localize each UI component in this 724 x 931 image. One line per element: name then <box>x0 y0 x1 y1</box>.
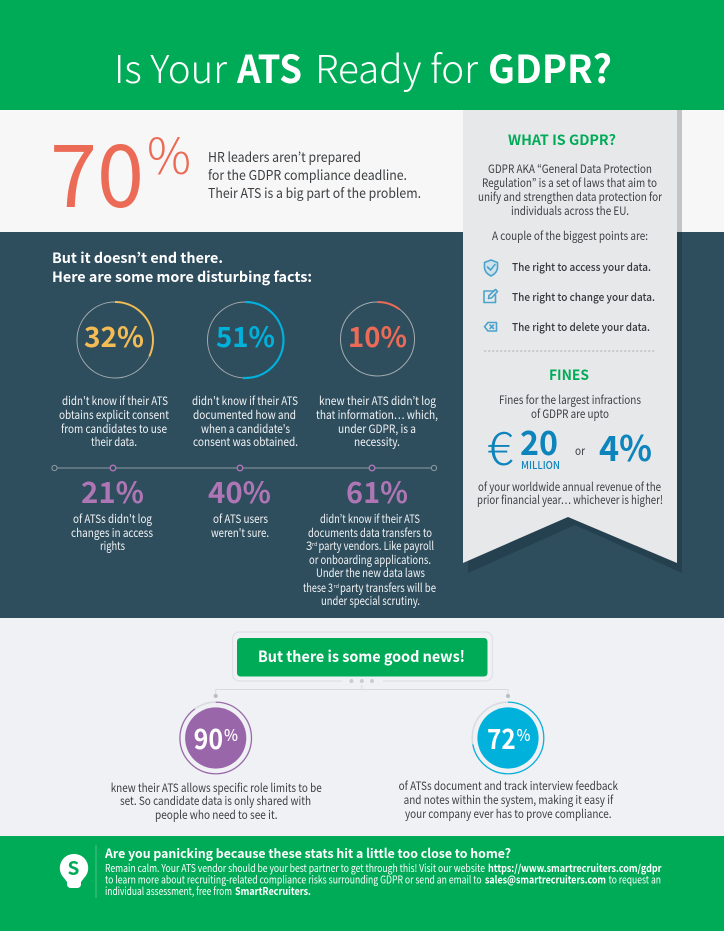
text: 32% description: from candidates to use <box>61 421 167 437</box>
text: 90% description: set. So candidate data is only shared with <box>120 793 311 809</box>
stat: 21%: of ATSs didn't log <box>73 511 152 527</box>
connector lines <box>214 685 510 698</box>
stat: 61%: party vendors. Like payroll <box>318 538 434 554</box>
text: 10% description <box>316 393 438 450</box>
stat: 90%: 90 <box>194 717 223 757</box>
text: 51% description: when a candidate's <box>201 421 290 437</box>
text: 72% description: of ATSs document and track interview feedback <box>399 778 619 794</box>
stat: 21%: rights <box>100 538 125 554</box>
fine: 20 million euro: MILLION <box>521 458 560 473</box>
stat: 90% <box>180 702 252 774</box>
footer body <box>105 860 662 898</box>
stat: 61%: 61% <box>346 470 408 512</box>
panel: footer <box>0 836 724 931</box>
footer body: to request an <box>609 872 661 886</box>
panel: disturbing facts <box>0 232 724 618</box>
text: 51% description: didn't know if their ATS <box>192 393 298 409</box>
fines intro: of GDPR are upto <box>531 406 609 422</box>
header band <box>0 0 724 110</box>
intro text <box>208 147 421 202</box>
text: 90% description <box>111 780 322 823</box>
GDPR definition: unify and strengthen data protection for <box>478 189 662 205</box>
text: 10% description: necessity. <box>354 434 400 450</box>
points intro: A couple of the biggest points are: <box>492 228 648 244</box>
text: 51% description: documented how and <box>193 407 296 423</box>
footer body: individual assessment, free from <box>105 883 232 898</box>
right to delete: The right to delete your data. <box>512 319 650 335</box>
or: or <box>575 443 585 459</box>
fines intro: Fines for the largest infractions <box>499 392 641 408</box>
donut stat: 32%: 32% <box>84 316 144 356</box>
stat: 61%: 3 <box>306 538 312 554</box>
stat: 61%: rd <box>334 582 339 590</box>
donut stat: 51%: 51% <box>216 316 275 356</box>
icon: light bulb: S <box>68 854 80 881</box>
stat: 21%: 21% <box>81 470 144 512</box>
intro text: for the GDPR compliance deadline. <box>208 165 407 184</box>
fines footnote: of your worldwide annual revenue of the <box>478 479 661 495</box>
text: 72% description: and notes within the system, making it easy if <box>404 792 614 808</box>
text: 32% description <box>59 393 170 450</box>
stat: 61%: rd <box>312 540 317 548</box>
stat: 61%: party transfers will be <box>340 580 436 596</box>
GDPR definition: GDPR AKA “General Data Protection <box>488 161 652 177</box>
donut stat: 51% <box>208 302 284 378</box>
donut stat: 10%: 10% <box>348 316 407 356</box>
fine: 20 million euro <box>487 413 560 479</box>
fines intro <box>499 392 641 422</box>
text: 90% description: knew their ATS allows specific role limits to be <box>111 780 322 796</box>
good news banner <box>232 632 492 683</box>
good news banner: But there is some good news! <box>258 645 465 667</box>
fines footnote: prior financial year… whichever is higher! <box>477 492 663 508</box>
footer body: Remain calm. Your ATS vendor should be your best partner to get through this! Visit our website <box>105 860 485 875</box>
heading: disturbing facts: But it doesn’t end there. <box>52 247 223 268</box>
heading: disturbing facts: Here are some more disturbing facts: <box>52 266 312 287</box>
stat: 40%: of ATS users <box>213 511 268 527</box>
footer body: https://www.smartrecruiters.com/gdpr <box>488 860 662 875</box>
text: 90% description: people who need to see it. <box>155 807 278 823</box>
right to access: The right to access your data. <box>512 259 651 275</box>
heading: what is GDPR: WHAT IS GDPR? <box>508 130 616 150</box>
stat: 61%: Under the new data laws <box>316 565 425 581</box>
fine: 4%: 4% <box>599 421 652 472</box>
icon: shield <box>484 260 498 276</box>
stat: 40%: 40% <box>208 470 271 512</box>
heading: disturbing facts <box>52 247 312 287</box>
stat: 61%: documents data transfers to <box>308 525 432 541</box>
timeline divider <box>52 465 437 471</box>
stat: 61%: didn’t know if their ATS <box>320 511 420 527</box>
panel: 70 percent intro <box>0 107 724 233</box>
text: 32% description: their data. <box>91 434 137 450</box>
icon: light bulb <box>60 854 88 888</box>
fines footnote <box>477 479 663 508</box>
stat: 61%: under special scrutiny. <box>321 593 420 609</box>
title <box>114 39 612 95</box>
text: 72% description <box>399 778 619 822</box>
stat: 61%: these 3 <box>303 580 333 596</box>
text: 72% description: your company ever has to prove compliance. <box>405 806 612 822</box>
stat: 21%: changes in access <box>71 525 153 541</box>
intro text: Their ATS is a big part of the problem. <box>208 183 421 202</box>
footer body: to learn more about recruiting-related compliance risks surrounding GDPR or send an email to <box>105 872 482 886</box>
stat: 40%: weren't sure. <box>211 525 269 541</box>
GDPR definition: individuals across the EU. <box>511 203 629 219</box>
stat: 72%: % <box>516 722 530 746</box>
title: ATS <box>236 39 302 95</box>
text: 51% description <box>192 393 298 450</box>
stat: 40% <box>208 470 271 541</box>
stat: 21% <box>71 470 153 554</box>
ribbon top edge shadow <box>677 110 682 232</box>
footer body: sales@smartrecruiters.com <box>485 872 606 886</box>
big stat: 70%: 70 <box>50 107 144 233</box>
text: 32% description: didn't know if their ATS <box>62 393 168 409</box>
footer body: SmartRecruiters. <box>235 883 311 898</box>
footer heading: Are you panicking because these stats hit a little too close to home? <box>104 843 511 862</box>
GDPR definition: Regulation” is a set of laws that aim to <box>482 175 657 191</box>
stat: 90%: % <box>224 722 238 746</box>
ribbon shadow <box>468 232 682 573</box>
stat: 72%: 72 <box>487 717 516 757</box>
big stat: 70%: % <box>147 117 191 189</box>
text: 10% description: knew their ATS didn’t log <box>319 393 436 409</box>
panel: good news <box>0 618 724 836</box>
stat: 72% <box>472 702 544 774</box>
right to change: The right to change your data. <box>512 289 655 305</box>
big stat: 70% <box>50 107 191 233</box>
donut stat: 10% <box>340 302 414 376</box>
stat: 61% <box>303 470 436 609</box>
fine: 20 million euro: 20 <box>520 417 558 465</box>
text: 51% description: consent was obtained. <box>193 434 298 450</box>
intro text: HR leaders aren’t prepared <box>208 147 361 166</box>
panel: what is GDPR ribbon <box>463 110 677 563</box>
text: 32% description: obtains explicit consent <box>59 407 170 423</box>
icon: delete key <box>484 322 496 331</box>
stat: 61%: or onboarding applications. <box>309 552 431 568</box>
text: 10% description: under GDPR, is a <box>338 421 416 437</box>
title: GDPR? <box>488 39 612 95</box>
heading: fines: FINES <box>549 365 589 385</box>
icon: edit <box>484 290 498 302</box>
title: Ready for <box>315 39 478 95</box>
fine: 20 million euro: € <box>487 413 513 479</box>
GDPR definition <box>478 161 662 219</box>
title: Is Your <box>114 39 227 95</box>
donut stat: 32% <box>77 302 153 378</box>
text: 10% description: that information… which, <box>316 407 438 423</box>
